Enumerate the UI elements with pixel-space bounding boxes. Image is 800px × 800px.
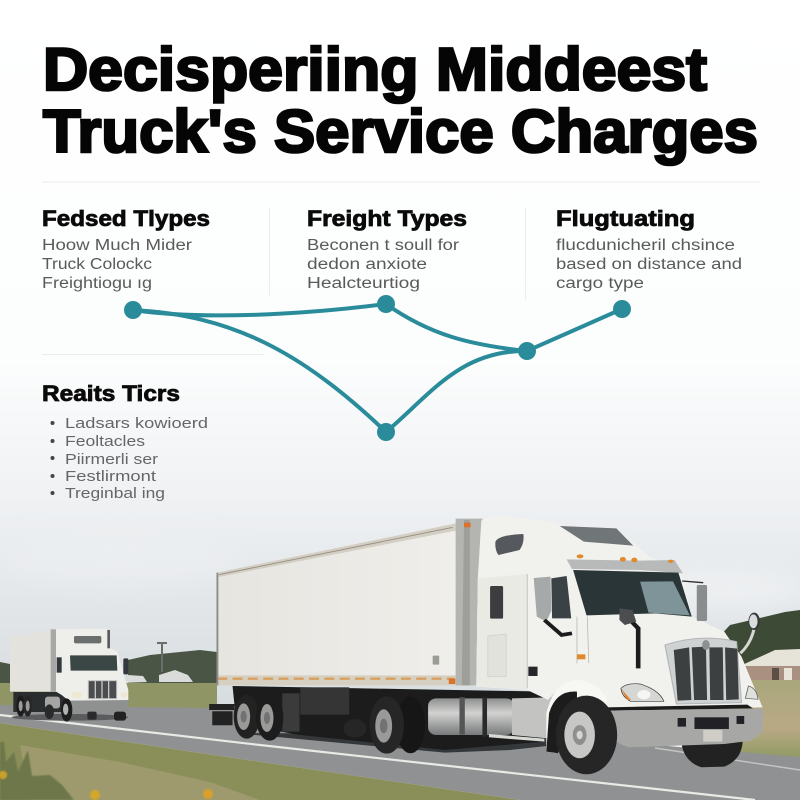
text block: Truck Colockc [42, 256, 152, 273]
fender shade [546, 680, 608, 753]
panel: flugtuating [556, 206, 742, 292]
sleeper window [495, 534, 524, 555]
front wheels [61, 698, 72, 722]
far axle wheel [344, 719, 366, 738]
side skirt box [300, 687, 349, 715]
right side mirror [682, 581, 707, 621]
text block: cargo type [556, 275, 644, 292]
marking far right [655, 748, 800, 770]
bullet list: Ladsars kowioerd [65, 415, 208, 432]
chassis [13, 692, 70, 712]
text block: dedon anxiote [307, 256, 427, 273]
far wheel [45, 704, 54, 719]
text block: based on distance and [556, 256, 742, 273]
title [43, 36, 758, 165]
grille frame [665, 638, 742, 704]
text block: Hoow Much Mider [42, 237, 192, 254]
small truck in background [10, 629, 129, 722]
panel: fedsed types [42, 206, 210, 292]
door handle [528, 667, 538, 676]
left field [0, 683, 217, 719]
box [10, 629, 56, 692]
heading: Fedsed Tlypes [42, 206, 210, 231]
chassis [233, 686, 552, 750]
trailer top rail [217, 523, 456, 577]
bumper [605, 709, 763, 747]
door mirror [534, 577, 551, 622]
windshield right pane [640, 581, 690, 615]
right field [700, 680, 800, 760]
side shade lines [527, 574, 589, 688]
text block: flucdunicheril chsince [556, 237, 735, 254]
licence plate [703, 730, 722, 742]
front wheel [556, 696, 617, 774]
distant buildings [122, 670, 193, 683]
shadow [12, 714, 128, 721]
text block: Freightiogu ıg [42, 275, 152, 292]
heading: Freight Types [307, 206, 467, 231]
tree line right [716, 610, 800, 680]
bullet list: Piirmerli ser [65, 451, 158, 468]
line chart [124, 295, 631, 441]
door panel [488, 634, 506, 677]
left headlight [621, 684, 664, 701]
trailer rear post [216, 573, 218, 685]
side window [551, 576, 571, 618]
grille [88, 681, 117, 699]
landscape [0, 610, 800, 800]
headlight [71, 692, 82, 698]
tank [45, 697, 60, 708]
text block [556, 237, 742, 292]
panel: freight types [307, 206, 467, 292]
text block [307, 237, 459, 292]
bumper [69, 700, 129, 712]
wheel arch [546, 692, 577, 753]
fuel tank [428, 697, 552, 742]
foliage [0, 742, 74, 800]
main truck [209, 517, 763, 774]
trailer wheels [234, 694, 283, 741]
right front tire [681, 742, 743, 767]
windshield [70, 655, 117, 671]
corner post [456, 519, 482, 685]
right headlight [745, 686, 758, 699]
dry grass patches [20, 745, 260, 800]
text block: Beconen t soull for [307, 237, 459, 254]
heading: Reaits Ticrs [42, 381, 180, 406]
orange marker [464, 523, 471, 527]
bullet list: Treginbal ing [65, 485, 165, 502]
foreground grass [0, 723, 520, 800]
text block [42, 237, 192, 292]
vent [433, 656, 439, 665]
bullet list: Feoltacles [65, 433, 145, 450]
heading: Flugtuating [556, 206, 695, 231]
bumper gap [606, 705, 753, 711]
mirror arm [544, 620, 572, 635]
hood mirror stalk [629, 618, 638, 668]
text block: Healcteurtiog [307, 275, 420, 292]
hood mirror [619, 608, 636, 625]
hood emblem [702, 640, 710, 650]
bullet list [50, 415, 208, 502]
ground shadow [238, 733, 556, 753]
clouds [0, 536, 800, 608]
road [0, 705, 800, 800]
louver vent [490, 586, 503, 619]
house [740, 649, 800, 681]
roof window [560, 526, 633, 546]
round mirror [740, 613, 760, 653]
visor [567, 559, 683, 573]
rear bumper [209, 704, 234, 725]
mirrors [57, 657, 62, 673]
bumper recess [678, 716, 744, 729]
panel: reaits ticrs [42, 381, 208, 502]
far tree line left [0, 650, 217, 684]
trailer rail line [219, 527, 453, 575]
cab [56, 629, 128, 702]
rear wheels [16, 695, 25, 717]
windshield [573, 570, 692, 617]
bullet list: Festlirmont [65, 468, 157, 485]
cab body [476, 517, 763, 711]
utility pole [157, 642, 167, 672]
drive wheels [370, 696, 425, 754]
marker lights [577, 554, 673, 659]
road marking [0, 715, 755, 800]
grille bars [674, 647, 739, 701]
title: Truck's Service Charges [43, 98, 758, 165]
header divider [42, 182, 760, 183]
sleeper shading [476, 574, 527, 689]
foreground flowers [0, 742, 213, 800]
title: Decisperiing Middeest [43, 36, 707, 103]
trailer side [217, 523, 456, 683]
trailer bottom rail [217, 675, 456, 685]
